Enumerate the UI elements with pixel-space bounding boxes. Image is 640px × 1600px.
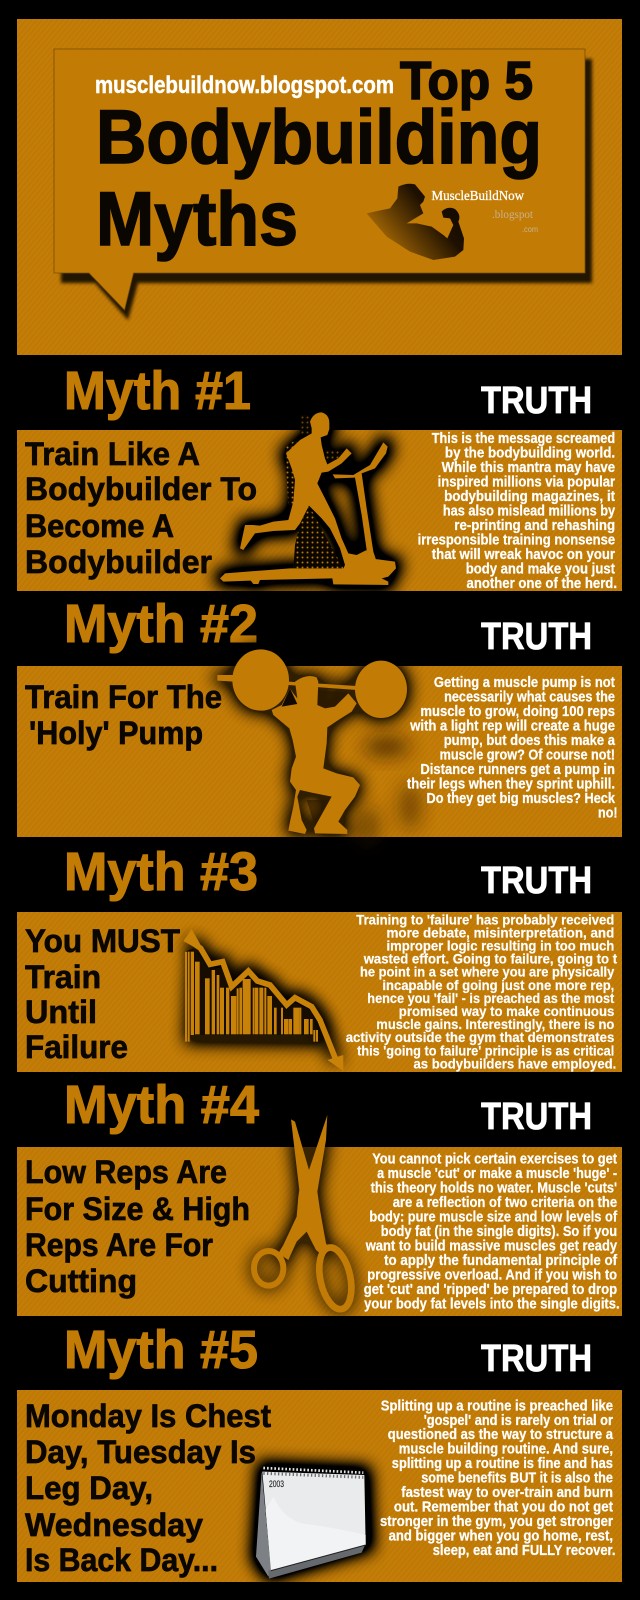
truth text: Distance runners get a pump in: [420, 762, 615, 778]
myth statement: Train: [25, 959, 101, 995]
panel: myth 1: [17, 430, 622, 591]
panel: header: [17, 19, 622, 355]
truth text: wasted effort. Going to failure, going to t: [363, 951, 617, 967]
myth statement: Failure: [25, 1029, 128, 1065]
truth text: muscle gains. Interestingly, there is no: [376, 1016, 614, 1032]
heading: myth 3: Myth #3: [64, 842, 258, 902]
calendar year: 2003: [269, 1479, 284, 1490]
truth text: more debate, misinterpretation, and: [386, 924, 614, 940]
truth text: activity outside the gym that demonstrates: [346, 1029, 614, 1045]
heading: truth: TRUTH: [481, 616, 592, 658]
myth statement: Train For The: [25, 679, 222, 715]
myth statement: 'Holy' Pump: [29, 715, 203, 751]
logo: [367, 184, 538, 260]
myth statement: Is Back Day...: [25, 1542, 218, 1578]
truth text: to apply the fundamental principle of: [384, 1253, 617, 1269]
truth text: [418, 431, 617, 592]
truth text: Splitting up a routine is preached like: [381, 1398, 613, 1414]
truth text: he point in a set where you are physically: [360, 964, 614, 980]
truth text: promised way to make continuous: [399, 1003, 614, 1019]
myth statement: Reps Are For: [25, 1227, 213, 1263]
site url: musclebuildnow.blogspot.com: [95, 72, 394, 99]
truth text: that will wreak havoc on your: [432, 547, 615, 563]
truth text: Do they get big muscles? Heck: [426, 791, 616, 807]
myth statement: [25, 679, 222, 751]
truth text: splitting up a routine is fine and has: [392, 1456, 613, 1472]
icon: treadmill runner: [220, 412, 396, 585]
title: bodybuilding: Bodybuilding: [96, 95, 542, 180]
icon: scissors: [254, 1115, 357, 1312]
truth text: This is the message screamed: [432, 431, 615, 447]
myth statement: Until: [25, 994, 97, 1030]
truth text: [407, 675, 618, 822]
icon: desk calendar: [252, 1462, 373, 1582]
truth text: inspired millions via popular: [438, 474, 615, 490]
truth text: stronger in the gym, you get stronger: [380, 1514, 613, 1530]
heading: truth: TRUTH: [481, 860, 592, 902]
truth text: get 'cut' and 'ripped' be prepared to drop: [364, 1282, 617, 1298]
title: myths: Myths: [96, 177, 298, 262]
myth statement: [25, 1154, 250, 1299]
myth statement: Monday Is Chest: [25, 1398, 271, 1434]
truth text: their legs when they sprint uphill.: [407, 776, 615, 792]
logo text: .blogspot: [492, 207, 534, 221]
speech bubble: [54, 49, 585, 310]
myth statement: Cutting: [25, 1263, 137, 1299]
truth text: [364, 1152, 620, 1312]
truth text: necessarily what causes the: [444, 690, 615, 706]
truth text: irresponsible training nonsense: [418, 532, 615, 548]
myth statement: [25, 1398, 271, 1578]
truth text: re-printing and rehashing: [454, 518, 615, 534]
heading: myth 1: Myth #1: [64, 361, 251, 421]
myth statement: [25, 923, 180, 1065]
icon: weightlifter squat: [217, 649, 420, 847]
truth text: progressive overload. And if you wish to: [367, 1268, 617, 1284]
panel: myth 3: [17, 912, 622, 1072]
myth statement: For Size & High: [25, 1191, 250, 1227]
truth text: some benefits BUT it is also the: [421, 1471, 613, 1487]
panel: myth 4: [17, 1147, 622, 1316]
icon: flexing bodybuilder: [367, 184, 464, 260]
section: myth 5: [17, 1320, 622, 1582]
myth statement: You MUST: [25, 923, 180, 959]
truth text: another one of the herd.: [466, 576, 617, 592]
truth text: Training to 'failure' has probably received: [356, 911, 614, 927]
truth text: [346, 911, 617, 1071]
icon: falling bar chart with arrow: [183, 929, 343, 1071]
truth text: hence you 'fail' - is preached as the most: [367, 990, 615, 1006]
heading: myth 4: Myth #4: [64, 1075, 259, 1135]
myth statement: Become A: [25, 508, 174, 544]
truth text: this theory holds no water. Muscle 'cuts': [371, 1181, 617, 1197]
truth text: incapable of going just one more rep,: [382, 977, 614, 993]
myth statement: Day, Tuesday Is: [25, 1434, 256, 1470]
title: top 5: Top 5: [400, 51, 533, 111]
truth text: muscle grow? Of course not!: [440, 748, 615, 764]
truth text: and bigger when you go home, rest,: [389, 1528, 613, 1544]
truth text: by the bodybuilding world.: [445, 446, 615, 462]
truth text: with a light rep will create a huge: [409, 718, 615, 734]
truth text: bodybuilding magazines, it: [444, 489, 615, 505]
section: myth 2: [17, 594, 622, 847]
truth text: improper logic resulting in too much: [386, 938, 614, 954]
truth text: While this mantra may have: [442, 460, 615, 476]
heading: truth: TRUTH: [481, 1338, 592, 1380]
truth text: Getting a muscle pump is not: [434, 675, 615, 691]
section: myth 1: [17, 361, 622, 592]
truth text: no!: [598, 806, 618, 822]
truth text: fastest way to over-train and burn: [401, 1485, 613, 1501]
heading: myth 2: Myth #2: [64, 594, 258, 654]
heading: myth 5: Myth #5: [64, 1320, 258, 1380]
panel: myth 2: [17, 666, 622, 837]
myth statement: Bodybuilder: [25, 544, 212, 580]
section: myth 3: [17, 842, 622, 1072]
myth statement: Wednesday: [25, 1507, 203, 1543]
section: myth 4: [17, 1075, 622, 1316]
truth text: muscle to grow, doing 100 reps: [420, 704, 615, 720]
truth text: has also mislead millions by: [443, 504, 615, 520]
truth text: sleep, eat and FULLY recover.: [433, 1543, 616, 1559]
truth text: questioned as the way to structure a: [388, 1427, 614, 1443]
truth text: [380, 1398, 616, 1559]
panel: myth 5: [17, 1390, 622, 1582]
truth text: out. Remember that you do not get: [394, 1500, 613, 1516]
myth statement: Leg Day,: [25, 1470, 153, 1506]
logo text: MuscleBuildNow: [432, 189, 525, 204]
heading: truth: TRUTH: [481, 380, 592, 422]
heading: truth: TRUTH: [481, 1096, 592, 1138]
truth text: muscle building routine. And sure,: [399, 1442, 613, 1458]
truth text: body fat (in the single digits). So if you: [381, 1224, 617, 1240]
myth statement: Low Reps Are: [25, 1154, 227, 1190]
truth text: 'gospel' and is rarely on trial or: [424, 1413, 613, 1429]
truth text: as bodybuilders have employed.: [414, 1055, 616, 1071]
myth statement: Train Like A: [25, 436, 200, 472]
truth text: are a reflection of two criteria on the: [393, 1195, 617, 1211]
truth text: want to build massive muscles get ready: [365, 1238, 617, 1254]
truth text: pump, but does this make a: [444, 733, 616, 749]
truth text: body and make you just: [466, 562, 615, 578]
speech bubble shadow: [61, 59, 592, 320]
myth statement: [25, 436, 257, 580]
truth text: this 'going to failure' principle is as critical: [357, 1042, 614, 1058]
myth statement: Bodybuilder To: [25, 471, 257, 507]
logo text: .com: [522, 225, 538, 234]
